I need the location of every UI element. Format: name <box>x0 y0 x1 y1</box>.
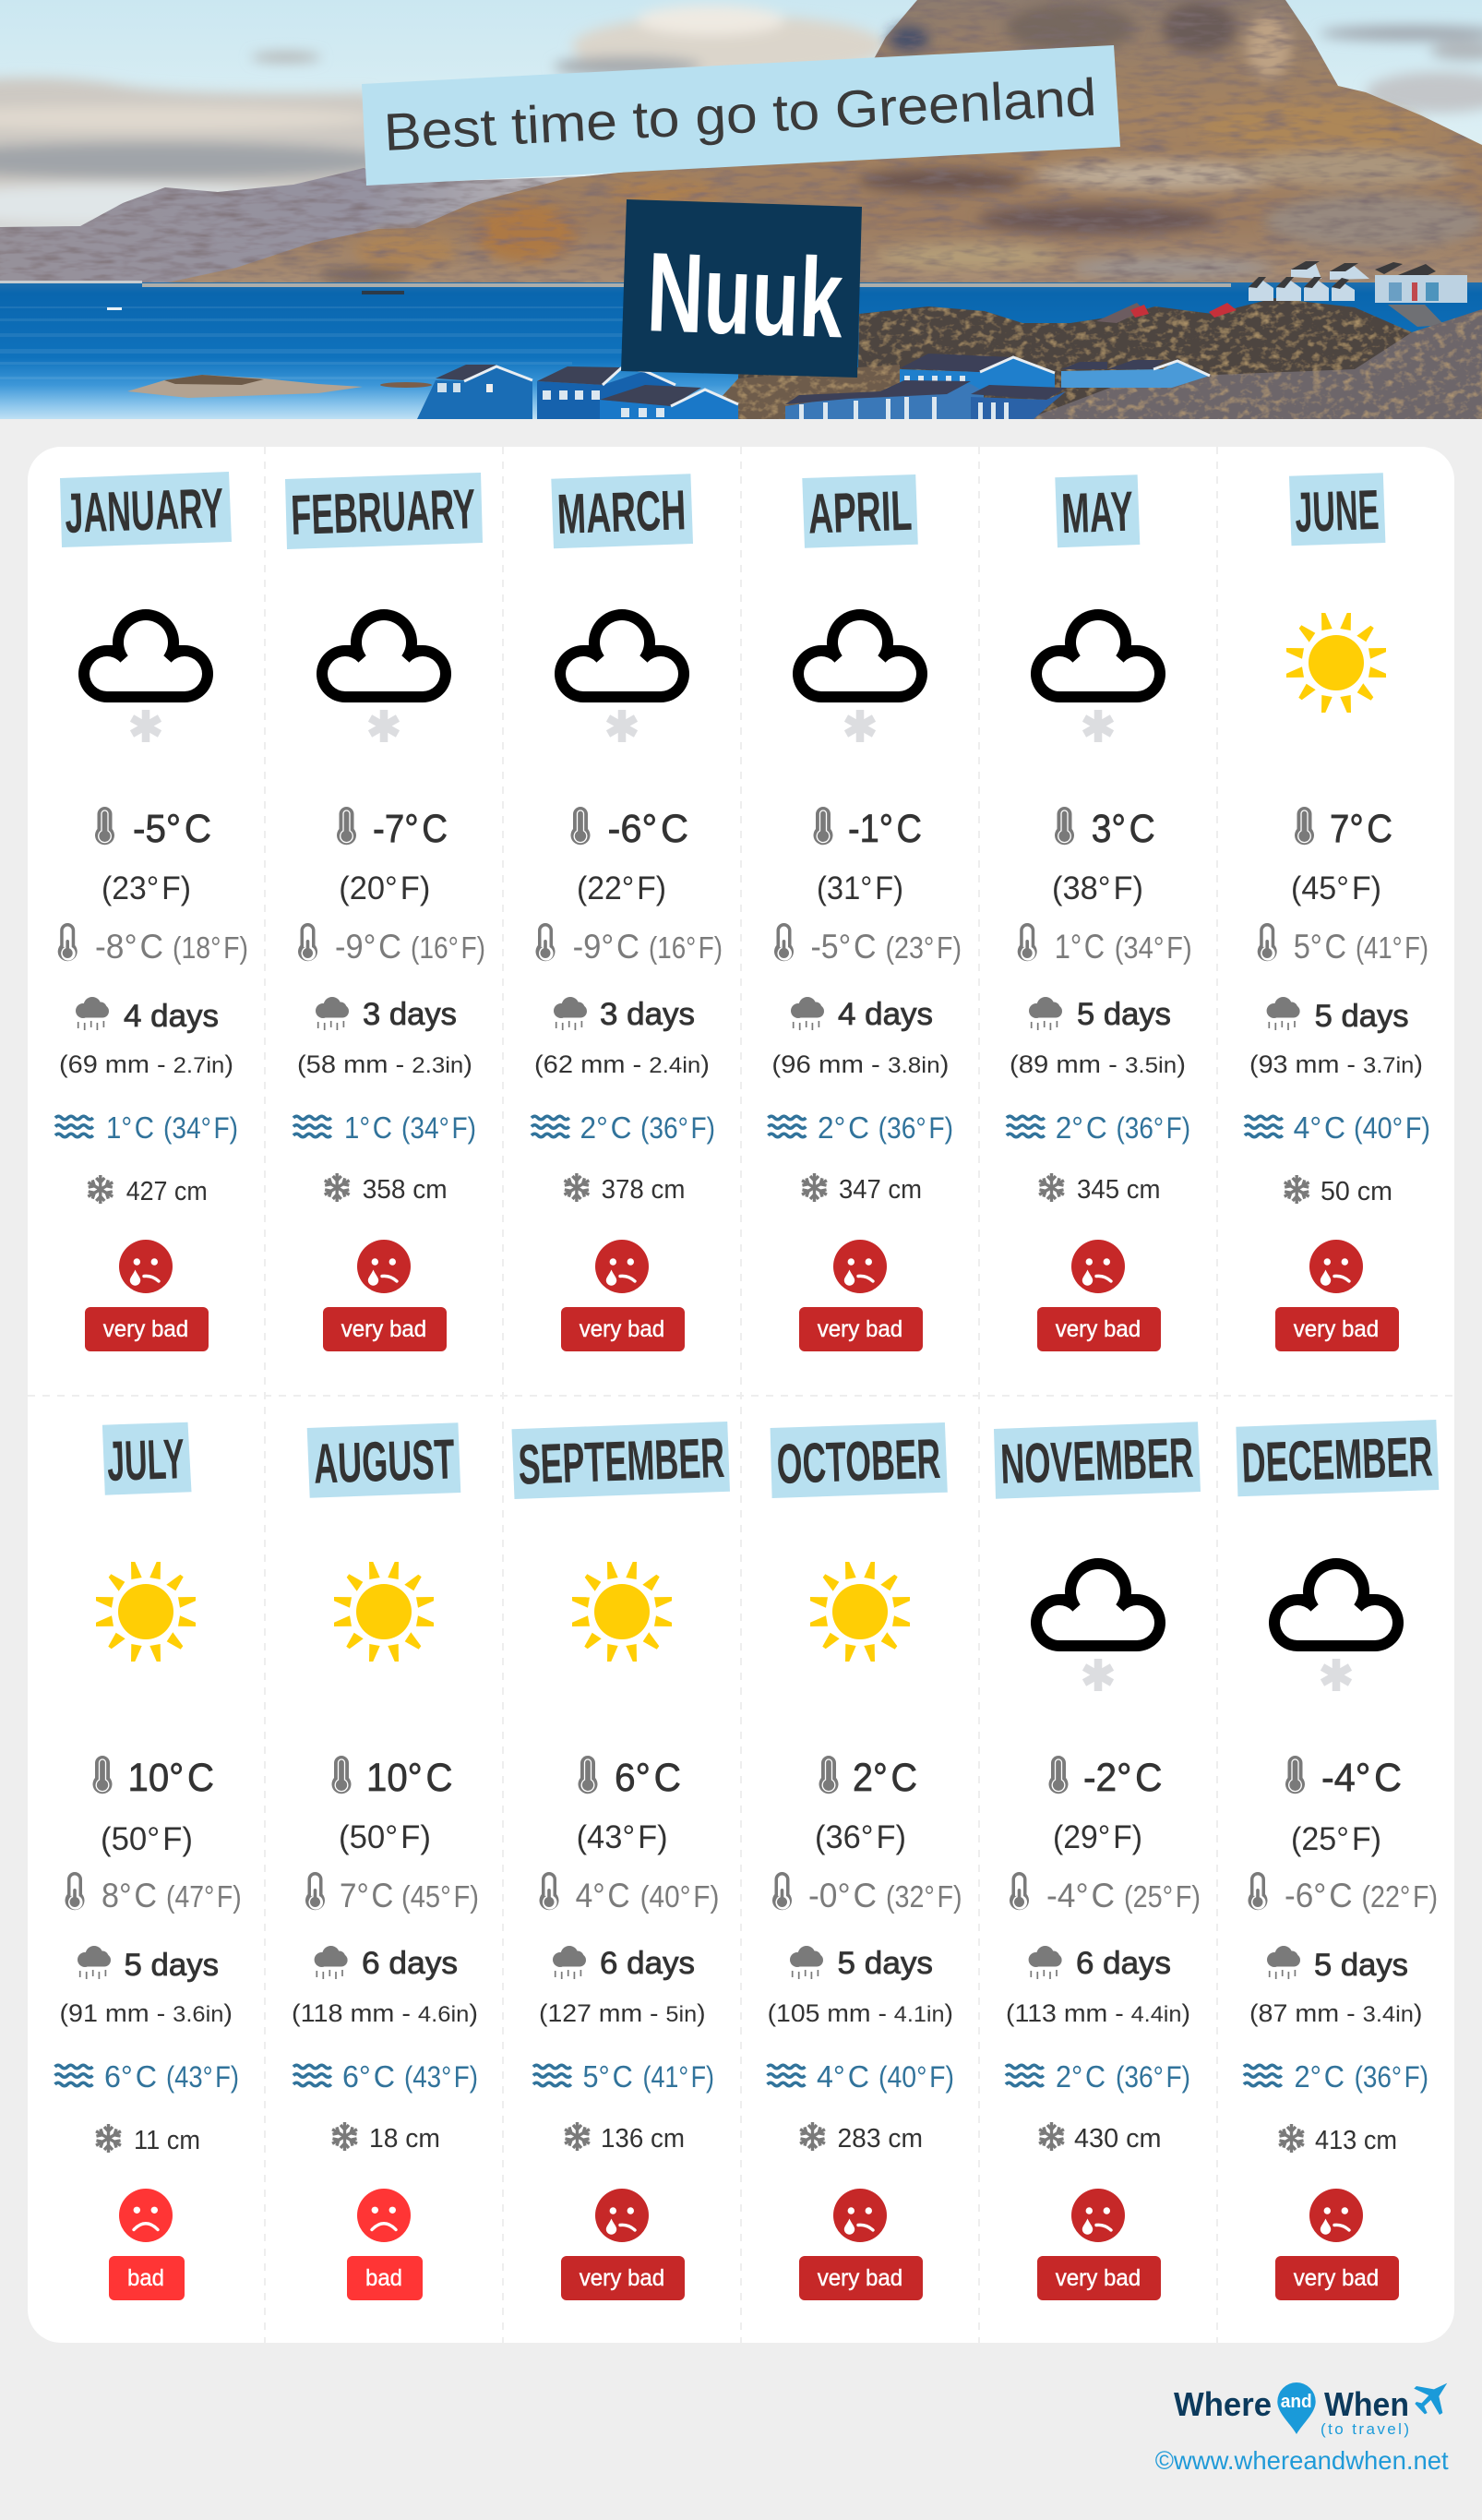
month label <box>802 474 918 548</box>
rating: very bad <box>323 1307 447 1351</box>
high temperature: -7°C <box>373 807 448 851</box>
icon: rain cloud <box>316 997 349 1030</box>
icon: rain cloud <box>791 997 824 1030</box>
rating: very bad <box>1275 1307 1399 1351</box>
month label <box>60 472 232 547</box>
panel: March <box>532 474 723 1351</box>
rating: very bad <box>561 1307 685 1351</box>
month label: FEBRUARY <box>290 477 476 546</box>
water temperature: 2°C <box>1056 1110 1107 1145</box>
month label: MAY <box>1060 480 1134 545</box>
low temperature: -9°C <box>335 928 401 966</box>
snowfall: 347 cm <box>839 1175 922 1205</box>
icon: low thermometer <box>1258 923 1277 961</box>
low temperature Fahrenheit: (16°F) <box>411 930 485 965</box>
rating: very bad <box>799 2256 923 2300</box>
rating: bad: bad <box>127 2265 164 2291</box>
water temperature: 6°C <box>342 2059 395 2094</box>
icon: very bad face <box>1071 2189 1125 2242</box>
icon: waves <box>532 1116 569 1137</box>
low temperature Fahrenheit: (25°F) <box>1124 1879 1201 1914</box>
month label: NOVEMBER <box>999 1426 1194 1495</box>
snowfall: 18 cm <box>369 2124 440 2154</box>
low temperature Fahrenheit: (32°F) <box>886 1879 962 1914</box>
header photo: Nuuk fjord and mountains <box>0 0 1482 419</box>
rainy days: 3 days <box>363 997 457 1032</box>
panel: November <box>994 1422 1201 2300</box>
icon: low thermometer <box>539 1872 559 1910</box>
high temperature: -5°C <box>133 807 211 851</box>
month label: JANUARY <box>64 476 224 545</box>
rating: very bad: very bad <box>1056 2265 1141 2291</box>
low temperature Fahrenheit: (47°F) <box>166 1879 242 1914</box>
icon: waves <box>293 1116 331 1137</box>
icon: snowflake <box>1037 2122 1066 2151</box>
rating: very bad: very bad <box>818 2265 902 2291</box>
icon: map pin: and <box>1281 2392 1312 2412</box>
low temperature Fahrenheit: (18°F) <box>173 930 248 965</box>
low temperature: 5°C <box>1294 928 1346 966</box>
icon: very bad face <box>1309 1240 1363 1293</box>
icon: low thermometer <box>1010 1872 1029 1910</box>
month label <box>102 1422 192 1495</box>
low temperature Fahrenheit: (16°F) <box>649 930 723 965</box>
icon: low thermometer <box>1018 923 1037 961</box>
icon: thermometer <box>570 807 591 845</box>
water temperature Fahrenheit: (36°F) <box>1355 2060 1428 2094</box>
rainfall: (113 mm - 4.4in) <box>1006 1999 1190 2027</box>
rating: very bad <box>1037 2256 1161 2300</box>
high temperature Fahrenheit: (20°F) <box>339 870 430 906</box>
panel: December <box>1236 1420 1439 2300</box>
panel: February <box>285 473 485 1351</box>
icon: waves <box>1006 2065 1044 2086</box>
panel: September <box>511 1422 730 2300</box>
icon: waves <box>55 1116 93 1137</box>
low temperature Fahrenheit: (45°F) <box>401 1879 479 1914</box>
high temperature Fahrenheit: (36°F) <box>815 1819 906 1855</box>
rating: bad: bad <box>365 2265 402 2291</box>
water temperature: 1°C <box>344 1110 392 1145</box>
rainfall: (89 mm - 3.5in) <box>1010 1050 1186 1078</box>
icon: very bad face <box>595 2189 649 2242</box>
icon: waves <box>533 2065 571 2086</box>
logo: Where and When <box>1174 2382 1447 2438</box>
icon: snowflake <box>94 2124 123 2153</box>
high temperature Fahrenheit: (23°F) <box>102 870 191 906</box>
icon: low thermometer <box>65 1872 85 1910</box>
water temperature Fahrenheit: (36°F) <box>640 1111 715 1145</box>
high temperature: -6°C <box>607 807 688 851</box>
month label: APRIL <box>807 479 913 546</box>
icon: rain cloud <box>553 1946 586 1979</box>
icon: rain cloud <box>315 1946 348 1979</box>
icon: waves <box>1244 2065 1282 2086</box>
icon: snowflake <box>323 1173 352 1202</box>
icon: low thermometer <box>298 923 317 961</box>
rainy days: 5 days <box>124 1948 219 1983</box>
icon: thermometer <box>1285 1756 1305 1794</box>
month label: SEPTEMBER <box>517 1426 725 1496</box>
low temperature Fahrenheit: (22°F) <box>1362 1879 1438 1914</box>
water temperature Fahrenheit: (40°F) <box>878 2060 954 2094</box>
icon: snowflake <box>86 1175 114 1204</box>
low temperature: -0°C <box>808 1877 877 1914</box>
rainy days: 5 days <box>838 1946 933 1981</box>
icon: cloud with snow <box>1031 609 1165 742</box>
icon: bad face <box>119 2189 173 2242</box>
icon: low thermometer <box>58 923 78 961</box>
icon: map pin <box>1277 2382 1316 2434</box>
city name banner <box>621 199 862 378</box>
icon: rain cloud <box>1267 1946 1300 1979</box>
icon: sun <box>1286 613 1386 713</box>
month label: OCTOBER <box>776 1427 941 1495</box>
rainfall: (87 mm - 3.4in) <box>1249 1999 1423 2027</box>
rainfall: (62 mm - 2.4in) <box>534 1050 710 1078</box>
month label: JULY <box>106 1427 185 1493</box>
panel: January <box>55 472 248 1351</box>
water temperature: 2°C <box>1294 2059 1345 2094</box>
rainy days: 6 days <box>362 1946 458 1981</box>
icon: thermometer <box>578 1756 598 1794</box>
icon: very bad face <box>595 1240 649 1293</box>
high temperature: 10°C <box>366 1756 452 1800</box>
hillside houses <box>1096 261 1467 327</box>
rainfall: (93 mm - 3.7in) <box>1249 1050 1423 1078</box>
month label <box>1055 474 1140 547</box>
low temperature: -6°C <box>1285 1877 1353 1914</box>
city name banner: Nuuk <box>645 229 845 361</box>
icon: sun <box>810 1562 910 1662</box>
low temperature: -8°C <box>95 928 163 966</box>
icon: sun <box>334 1562 434 1662</box>
snowfall: 358 cm <box>363 1175 448 1205</box>
rating: bad <box>109 2256 185 2300</box>
icon: bad face <box>357 2189 411 2242</box>
small island <box>127 375 432 398</box>
icon: thermometer <box>1055 807 1074 845</box>
snowfall: 413 cm <box>1315 2126 1397 2155</box>
icon: cloud with snow <box>793 609 927 742</box>
icon: cloud with snow <box>317 609 451 742</box>
logo: Where and When: When <box>1324 2385 1409 2423</box>
icon: rain cloud <box>76 997 109 1030</box>
icon: thermometer <box>1048 1756 1069 1794</box>
high temperature: 7°C <box>1330 807 1392 851</box>
month label <box>771 1422 948 1498</box>
panel: June <box>1245 473 1430 1351</box>
panel: July <box>55 1422 242 2300</box>
title banner: Best time to go to Greenland <box>382 68 1098 162</box>
icon: waves <box>768 2065 805 2086</box>
low temperature: -4°C <box>1046 1877 1115 1914</box>
snowfall: 430 cm <box>1074 2124 1162 2154</box>
rainy days: 3 days <box>600 997 695 1032</box>
rating: very bad <box>561 2256 685 2300</box>
high temperature Fahrenheit: (29°F) <box>1053 1819 1142 1855</box>
icon: snowflake <box>1277 2124 1306 2153</box>
icon: very bad face <box>833 2189 887 2242</box>
rating: very bad: very bad <box>1294 1316 1379 1342</box>
icon: thermometer <box>1295 807 1314 845</box>
icon: thermometer <box>337 807 356 845</box>
high temperature Fahrenheit: (45°F) <box>1291 870 1381 906</box>
logo: Where and When: Where <box>1174 2385 1272 2423</box>
icon: cloud with snow <box>78 609 213 742</box>
icon: snowflake <box>800 1173 829 1202</box>
rating: very bad: very bad <box>1056 1316 1141 1342</box>
front rocks <box>1027 309 1482 419</box>
icon: low thermometer <box>305 1872 325 1910</box>
snowfall: 345 cm <box>1077 1175 1161 1205</box>
rainy days: 6 days <box>600 1946 695 1981</box>
icon: sun <box>96 1562 196 1662</box>
rainy days: 5 days <box>1077 997 1171 1032</box>
high temperature: 3°C <box>1092 807 1155 851</box>
low temperature Fahrenheit: (34°F) <box>1115 930 1192 965</box>
water temperature: 2°C <box>818 1110 869 1145</box>
icon: rain cloud <box>78 1946 111 1979</box>
high temperature Fahrenheit: (43°F) <box>577 1819 668 1855</box>
rating: very bad <box>85 1307 209 1351</box>
month label <box>551 474 693 548</box>
icon: snowflake <box>1283 1175 1311 1204</box>
high temperature Fahrenheit: (22°F) <box>577 870 666 906</box>
rainfall: (127 mm - 5in) <box>539 1999 706 2027</box>
rainfall: (91 mm - 3.6in) <box>59 1999 233 2027</box>
icon: very bad face <box>119 1240 173 1293</box>
icon: waves <box>1007 1116 1045 1137</box>
icon: snowflake <box>1037 1173 1066 1202</box>
panel: monthly weather card <box>28 447 1454 2343</box>
icon: cloud with snow <box>1031 1558 1165 1691</box>
icon: low thermometer <box>1248 1872 1268 1910</box>
water temperature: 4°C <box>817 2059 869 2094</box>
icon: thermometer <box>95 807 114 845</box>
snowfall: 50 cm <box>1321 1177 1392 1206</box>
snowfall: 283 cm <box>838 2124 923 2154</box>
icon: cloud with snow <box>555 609 689 742</box>
icon: low thermometer <box>772 1872 792 1910</box>
icon: waves <box>1245 1116 1283 1137</box>
rating: very bad <box>799 1307 923 1351</box>
panel: May <box>1007 474 1192 1351</box>
rainfall: (105 mm - 4.1in) <box>768 1999 953 2027</box>
icon: thermometer <box>92 1756 113 1794</box>
low temperature: -9°C <box>573 928 639 966</box>
rating: bad <box>347 2256 423 2300</box>
icon: rain cloud <box>790 1946 823 1979</box>
rainy days: 4 days <box>124 999 219 1034</box>
icon: very bad face <box>833 1240 887 1293</box>
low temperature: 1°C <box>1055 928 1105 966</box>
water temperature Fahrenheit: (43°F) <box>166 2060 239 2094</box>
water temperature Fahrenheit: (41°F) <box>642 2060 714 2094</box>
icon: thermometer <box>814 807 832 845</box>
rainy days: 4 days <box>838 997 933 1032</box>
low temperature: 8°C <box>102 1877 157 1914</box>
high temperature Fahrenheit: (25°F) <box>1291 1821 1381 1857</box>
rainy days: 5 days <box>1315 999 1409 1034</box>
water temperature: 6°C <box>104 2059 157 2094</box>
icon: very bad face <box>357 1240 411 1293</box>
icon: thermometer <box>332 1756 351 1794</box>
month label <box>1289 473 1385 546</box>
water temperature Fahrenheit: (36°F) <box>1117 1111 1190 1145</box>
snowfall: 11 cm <box>134 2126 200 2155</box>
high temperature Fahrenheit: (38°F) <box>1052 870 1143 906</box>
rating: very bad: very bad <box>580 2265 664 2291</box>
high temperature: 6°C <box>615 1756 681 1800</box>
icon: rain cloud <box>1029 1946 1062 1979</box>
snowfall: 136 cm <box>601 2124 685 2154</box>
icon: cloud with snow <box>1269 1558 1404 1691</box>
rainfall: (69 mm - 2.7in) <box>59 1050 233 1078</box>
month label <box>285 473 483 549</box>
rainfall: (58 mm - 2.3in) <box>297 1050 472 1078</box>
panel: August <box>292 1422 479 2300</box>
month label: MARCH <box>556 478 687 546</box>
low temperature: 4°C <box>576 1877 630 1914</box>
water temperature Fahrenheit: (36°F) <box>878 1111 953 1145</box>
high temperature: -4°C <box>1321 1756 1402 1800</box>
rainfall: (118 mm - 4.6in) <box>292 1999 478 2027</box>
high temperature: 2°C <box>853 1756 917 1800</box>
water temperature Fahrenheit: (43°F) <box>404 2060 478 2094</box>
icon: sun <box>572 1562 672 1662</box>
rating: very bad: very bad <box>580 1316 664 1342</box>
rating: very bad: very bad <box>103 1316 188 1342</box>
month label <box>307 1422 460 1498</box>
month label <box>994 1422 1201 1499</box>
high temperature: -1°C <box>848 807 922 851</box>
low temperature Fahrenheit: (40°F) <box>640 1879 719 1914</box>
logo: Where and When: (to travel) <box>1321 2420 1409 2438</box>
icon: thermometer <box>819 1756 838 1794</box>
icon: waves <box>55 2065 92 2086</box>
rating: very bad <box>1275 2256 1399 2300</box>
month label: JUNE <box>1294 478 1380 544</box>
water temperature Fahrenheit: (40°F) <box>1354 1111 1430 1145</box>
water temperature Fahrenheit: (34°F) <box>163 1111 238 1145</box>
icon: rain cloud <box>1029 997 1062 1030</box>
water temperature: 2°C <box>580 1110 631 1145</box>
rocks behind houses <box>738 298 1482 419</box>
title banner <box>362 45 1120 186</box>
water temperature Fahrenheit: (36°F) <box>1116 2060 1190 2094</box>
icon: snowflake <box>562 1173 592 1202</box>
water temperature: 4°C <box>1294 1110 1345 1145</box>
icon: rain cloud <box>1267 997 1300 1030</box>
high temperature Fahrenheit: (50°F) <box>339 1819 431 1855</box>
rating: very bad <box>1037 1307 1161 1351</box>
rating: very bad: very bad <box>1294 2265 1379 2291</box>
low temperature: 7°C <box>340 1877 393 1914</box>
high temperature Fahrenheit: (31°F) <box>817 870 903 906</box>
rainy days: 6 days <box>1076 1946 1171 1981</box>
rainfall: (96 mm - 3.8in) <box>771 1050 949 1078</box>
rating: very bad: very bad <box>818 1316 902 1342</box>
high temperature: -2°C <box>1083 1756 1163 1800</box>
icon: airplane <box>1414 2383 1447 2415</box>
icon: snowflake <box>798 2122 827 2151</box>
month label: AUGUST <box>313 1427 456 1495</box>
icon: waves <box>768 1116 806 1137</box>
low temperature Fahrenheit: (41°F) <box>1356 930 1428 965</box>
icon: rain cloud <box>554 997 587 1030</box>
rating: very bad: very bad <box>341 1316 426 1342</box>
snowfall: 378 cm <box>602 1175 685 1205</box>
icon: low thermometer <box>535 923 556 961</box>
month label <box>511 1422 730 1499</box>
rainy days: 5 days <box>1314 1948 1408 1983</box>
water temperature: 2°C <box>1056 2059 1106 2094</box>
panel: October <box>768 1422 962 2300</box>
blue houses <box>417 354 1210 419</box>
water temperature: 5°C <box>583 2059 633 2094</box>
panel: April <box>768 474 962 1351</box>
icon: snowflake <box>563 2122 592 2151</box>
website credit: ©www.whereandwhen.net <box>1155 2446 1449 2475</box>
icon: low thermometer <box>774 923 794 961</box>
low temperature: -5°C <box>810 928 877 966</box>
water temperature: 1°C <box>106 1110 154 1145</box>
low temperature Fahrenheit: (23°F) <box>886 930 962 965</box>
snowfall: 427 cm <box>126 1177 208 1206</box>
high temperature Fahrenheit: (50°F) <box>101 1821 193 1857</box>
icon: very bad face <box>1309 2189 1363 2242</box>
high temperature: 10°C <box>127 1756 214 1800</box>
icon: very bad face <box>1071 1240 1125 1293</box>
water temperature Fahrenheit: (34°F) <box>401 1111 476 1145</box>
icon: snowflake <box>330 2122 359 2151</box>
icon: waves <box>293 2065 331 2086</box>
